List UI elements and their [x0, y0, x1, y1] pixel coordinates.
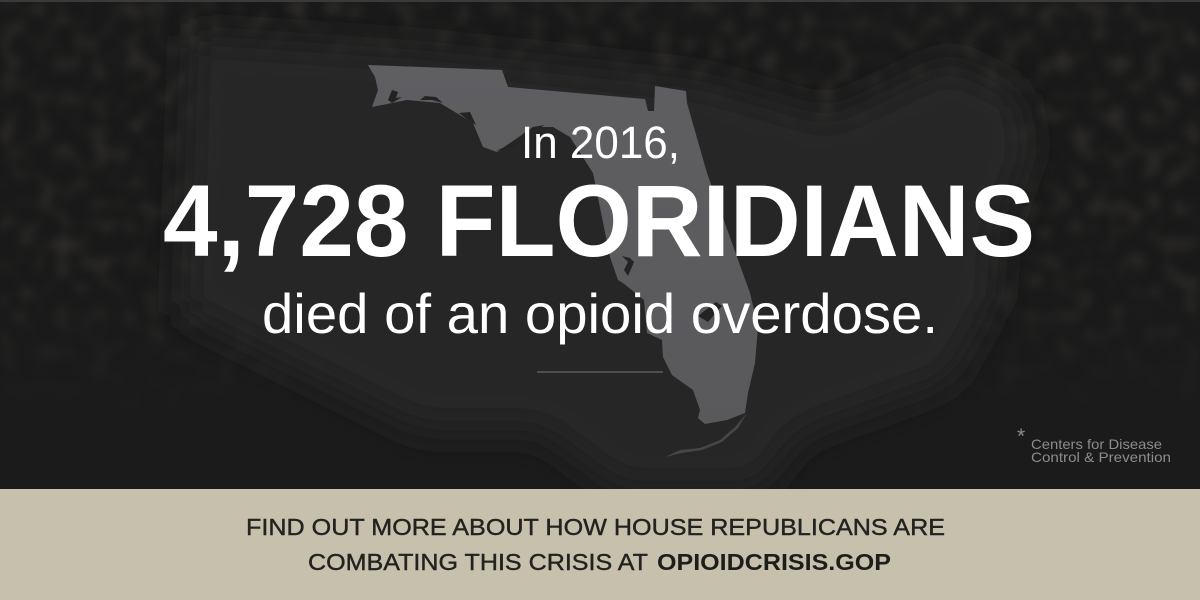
- website link: OPIOIDCRISIS.GOP: [657, 549, 891, 575]
- source footnote: Control & Prevention: [1031, 449, 1171, 465]
- source footnote: [1017, 425, 1171, 465]
- call to action line two: COMBATING THIS CRISIS AT: [308, 549, 648, 575]
- intro text: In 2016: In 2016,: [521, 117, 680, 168]
- source footnote: *: [1017, 425, 1025, 448]
- headline: 4,728 Floridians: 4,728 FLORIDIANS: [163, 164, 1035, 278]
- call to action band: [0, 489, 1200, 600]
- Florida map silhouette: [368, 65, 758, 457]
- source footnote: Centers for Disease: [1031, 436, 1162, 452]
- subheading: died of an opioid overdose: died of an opioid overdose.: [262, 282, 938, 345]
- call to action line one: FIND OUT MORE ABOUT HOW HOUSE REPUBLICANS ARE: [246, 514, 945, 540]
- divider rule: [537, 372, 663, 373]
